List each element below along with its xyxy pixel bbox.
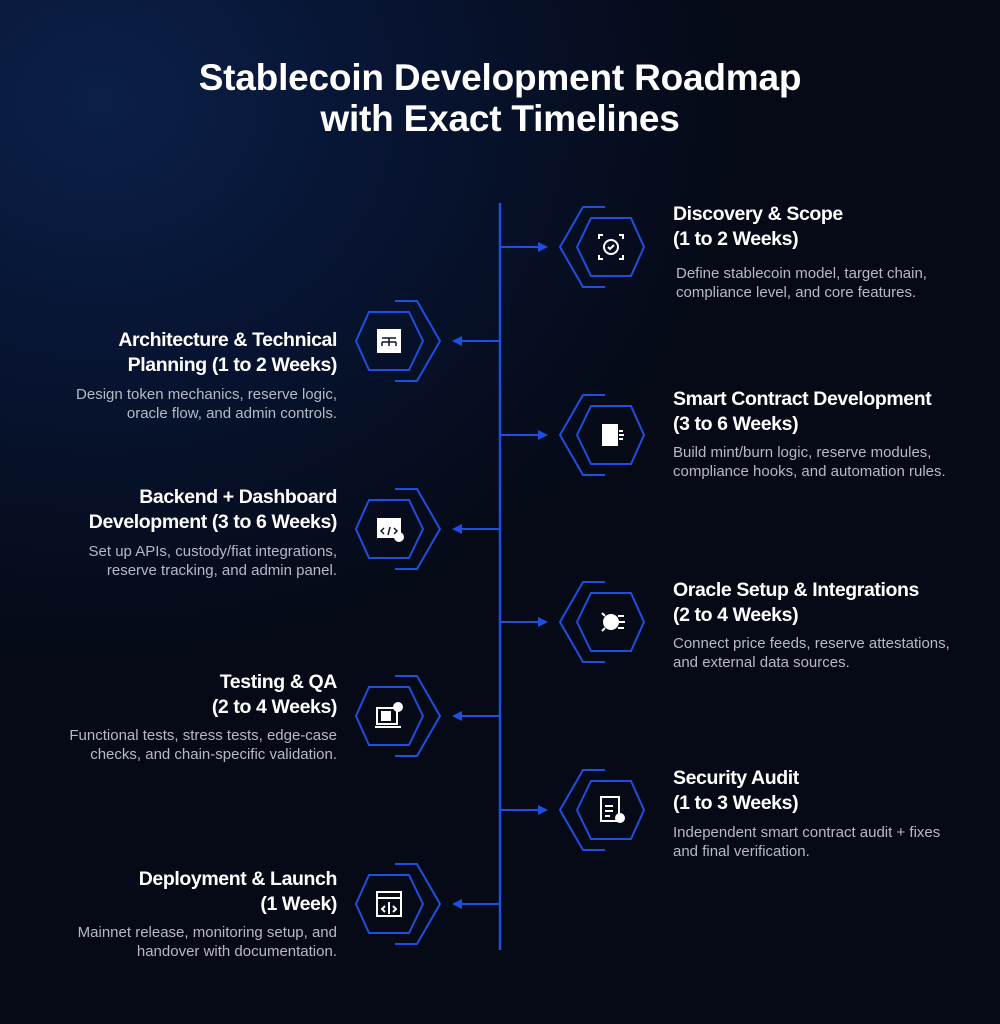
desc: Security Audit: and final verification. (673, 843, 810, 860)
vertical timeline line (499, 203, 501, 950)
step: Smart Contract: (3 to 6 Weeks) (673, 413, 798, 435)
step: Deployment (139, 868, 337, 915)
desc: Testing: Functional tests, stress tests, edge-case (69, 727, 337, 744)
desc: Discovery: compliance level, and core features. (676, 284, 916, 301)
step: Deployment: Deployment & Launch (139, 868, 337, 890)
step: Backend: Development (3 to 6 Weeks) (89, 511, 337, 533)
desc: Backend: Set up APIs, custody/fiat integrations, (89, 543, 337, 560)
desc: Discovery (676, 265, 927, 301)
step: Security Audit: (1 to 3 Weeks) (673, 792, 798, 814)
step: Architecture: Planning (1 to 2 Weeks) (128, 354, 337, 376)
step: Testing (212, 671, 337, 718)
step: Security Audit (673, 767, 799, 814)
desc: Oracle (673, 635, 950, 671)
desc: Architecture (76, 386, 337, 422)
desc: Testing (69, 727, 337, 763)
desc: Deployment: handover with documentation. (137, 943, 337, 960)
title: with Exact Timelines (320, 98, 680, 139)
desc: Smart Contract: Build mint/burn logic, reserve modules, (673, 444, 931, 461)
desc: Testing: checks, and chain-specific validation. (90, 746, 337, 763)
step: Discovery & Scope: (1 to 2 Weeks) (673, 228, 798, 250)
step: Testing: Testing & QA (220, 671, 337, 693)
step: Architecture (118, 329, 337, 376)
step: Oracle (673, 579, 919, 626)
step: Deployment: (1 Week) (260, 893, 337, 915)
desc: Architecture: oracle flow, and admin controls. (127, 405, 337, 422)
step: Backend: Backend + Dashboard (139, 486, 337, 508)
step: Architecture: Architecture & Technical (118, 329, 337, 351)
step: Testing: (2 to 4 Weeks) (212, 696, 337, 718)
icons (375, 235, 625, 916)
desc: Oracle: Connect price feeds, reserve attestations, (673, 635, 950, 652)
desc: Backend (89, 543, 337, 579)
step: Security Audit: Security Audit (673, 767, 799, 789)
title: Stablecoin Development Roadmap (199, 57, 801, 98)
desc: Deployment (78, 924, 337, 960)
step: Oracle: Oracle Setup & Integrations (673, 579, 919, 601)
desc: Security Audit: Independent smart contract audit + fixes (673, 824, 940, 841)
arrows and hexagons (452, 242, 548, 909)
step: Smart Contract (673, 388, 932, 435)
desc: Backend: reserve tracking, and admin panel. (107, 562, 337, 579)
desc: Security Audit (673, 824, 940, 860)
step: Oracle: (2 to 4 Weeks) (673, 604, 798, 626)
desc: Smart Contract: compliance hooks, and automation rules. (673, 463, 946, 480)
step: Backend (89, 486, 337, 533)
desc: Smart Contract (673, 444, 946, 480)
step: Discovery & Scope: Discovery & Scope (673, 203, 843, 225)
desc: Discovery: Define stablecoin model, target chain, (676, 265, 927, 282)
title (199, 57, 801, 139)
step: Smart Contract: Smart Contract Development (673, 388, 931, 410)
desc: Architecture: Design token mechanics, reserve logic, (76, 386, 337, 403)
desc: Deployment: Mainnet release, monitoring setup, and (78, 924, 337, 941)
desc: Oracle: and external data sources. (673, 654, 850, 671)
step: Discovery & Scope (673, 203, 843, 250)
